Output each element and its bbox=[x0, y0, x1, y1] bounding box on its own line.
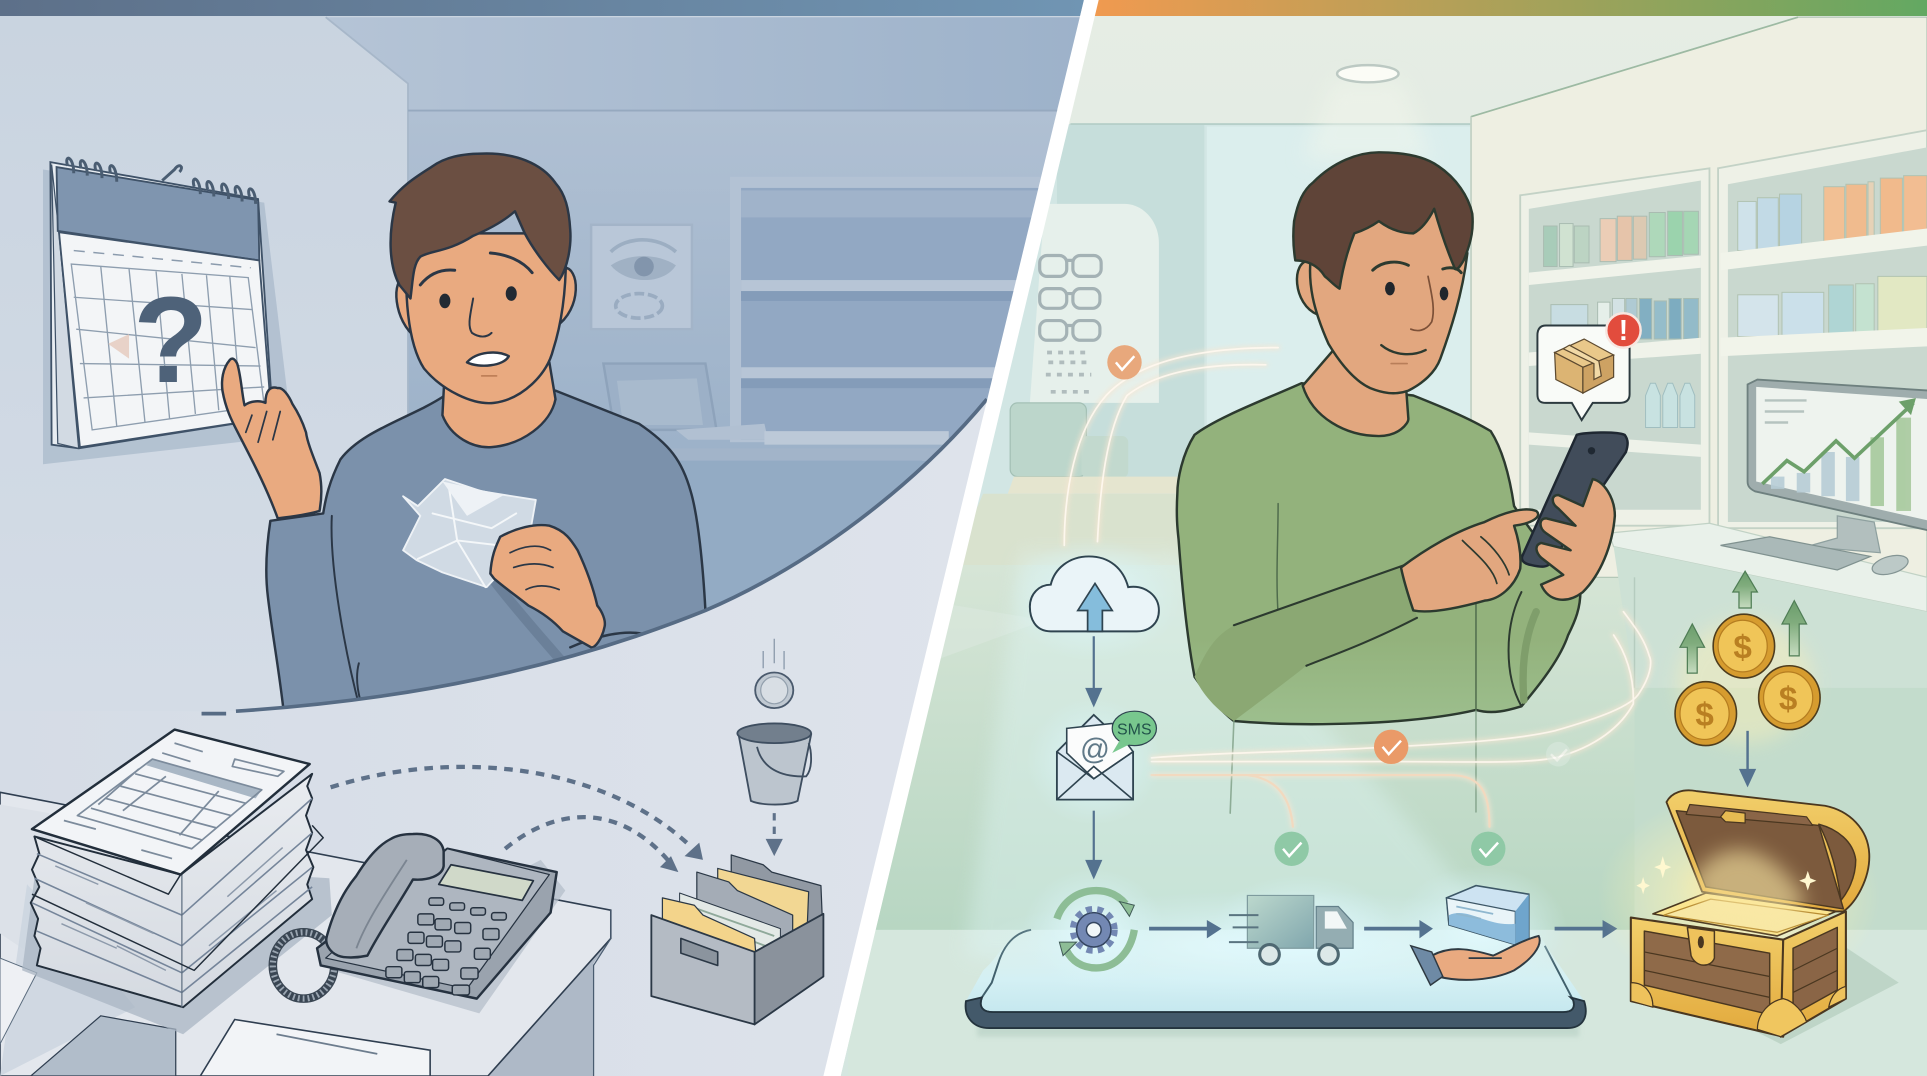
hand holding paper bbox=[490, 525, 605, 647]
badge: green check right bbox=[1471, 832, 1505, 866]
eye poster bbox=[591, 225, 692, 329]
desk bbox=[0, 792, 611, 1076]
neck bbox=[1303, 350, 1408, 436]
corner brackets bbox=[1631, 983, 1653, 1007]
shelving unit right bbox=[1718, 130, 1927, 528]
sleeve folds bbox=[1195, 565, 1417, 721]
bottles lower bbox=[1646, 383, 1695, 427]
medicine boxes top bbox=[1738, 176, 1927, 251]
telephone base bbox=[317, 849, 557, 999]
ear bbox=[1297, 260, 1317, 314]
arrow: dashed from phone to file box bbox=[505, 817, 678, 872]
green sweater bbox=[1177, 383, 1580, 724]
coin left: $ bbox=[1695, 697, 1714, 734]
reception computer and counter bbox=[602, 362, 949, 598]
icon: notification bubble with parcel bbox=[1537, 313, 1641, 420]
coin top bbox=[1713, 614, 1775, 678]
glow: flowing connection lines bbox=[1064, 348, 1651, 827]
phone bbox=[1522, 432, 1628, 567]
icon: file box with folders bbox=[651, 855, 823, 1024]
glow: holographic projection bbox=[965, 553, 1524, 958]
icon: tablet base bbox=[966, 891, 1586, 1037]
coin left bbox=[1675, 682, 1737, 746]
icon: notification bubble with parcel: ! bbox=[1619, 314, 1628, 346]
mouse bbox=[1870, 552, 1910, 578]
coin right bbox=[1759, 666, 1820, 730]
icon: gold coins bbox=[1675, 614, 1820, 746]
panel: after, automated process bbox=[836, 0, 1927, 1076]
question mark: ? bbox=[133, 272, 208, 409]
sparkles bbox=[1636, 856, 1816, 894]
right wall bbox=[1471, 17, 1927, 577]
face bbox=[1310, 197, 1467, 393]
cabinet and counter bbox=[946, 403, 1186, 577]
arrow: cloud to messages bbox=[1085, 636, 1102, 708]
background clinic room bbox=[876, 16, 1927, 930]
medicine boxes upper bbox=[1544, 211, 1698, 267]
top invoice sheet bbox=[32, 730, 310, 875]
icon: cloud upload bbox=[1030, 556, 1159, 631]
person: worried patient bbox=[222, 154, 737, 725]
arrow: customer to treasure chest bbox=[1555, 920, 1617, 938]
raised hand pointing at calendar bbox=[222, 359, 321, 518]
email at sign: @ bbox=[1080, 733, 1110, 766]
alert badge bbox=[1606, 313, 1641, 348]
icon: envelope with SMS bubble: SMS bbox=[1117, 722, 1152, 739]
arrow: delivery to customer bbox=[1364, 920, 1433, 938]
face bbox=[406, 233, 566, 403]
shelving unit left bbox=[1520, 168, 1709, 526]
worried eyes bbox=[439, 294, 450, 308]
smiling face details bbox=[1385, 282, 1395, 295]
arrows: rising green arrows bbox=[1680, 571, 1807, 673]
ceiling light bbox=[1310, 64, 1424, 153]
calendar grid bbox=[71, 264, 264, 430]
background room bbox=[0, 16, 1080, 608]
neck bbox=[442, 362, 555, 447]
icon: open treasure chest bbox=[1598, 790, 1899, 1044]
keypad bbox=[386, 898, 506, 995]
coin right: $ bbox=[1779, 681, 1797, 718]
arrow: dashed from paper stack to file box bbox=[331, 767, 703, 860]
empty shelves bbox=[730, 188, 1038, 442]
icon: crumpled paper bbox=[403, 479, 536, 587]
badge: orange check middle bbox=[1374, 730, 1408, 764]
ears bbox=[395, 283, 410, 334]
desk with monitor bbox=[1609, 380, 1927, 688]
check badges bbox=[1107, 345, 1571, 866]
hair bbox=[1293, 152, 1473, 289]
rising bar chart bbox=[1771, 418, 1911, 511]
arrow: sync to delivery bbox=[1149, 920, 1222, 938]
chest side bbox=[1781, 911, 1846, 1037]
box side and front bbox=[755, 914, 823, 1024]
arrow: messages to sync bbox=[1085, 811, 1102, 879]
divider between panels bbox=[823, 0, 1099, 1076]
handset bbox=[326, 834, 444, 957]
icon: falling coin bbox=[755, 639, 793, 708]
icon: gear with sync arrows bbox=[1057, 891, 1134, 968]
hand holding phone bbox=[1536, 479, 1615, 600]
icon: delivery truck bbox=[1229, 895, 1353, 964]
jagged sheet edges bbox=[31, 774, 313, 1007]
icon: wall calendar with question mark bbox=[43, 158, 292, 464]
hair bbox=[390, 154, 570, 298]
monitor stand bbox=[1807, 516, 1880, 553]
medicine boxes middle bbox=[1738, 276, 1927, 337]
top status bar: after bbox=[1094, 0, 1927, 16]
arrow: dashed from bucket to file box bbox=[766, 813, 783, 856]
icon: stack of paper forms bbox=[22, 730, 332, 1034]
floor bbox=[860, 565, 1635, 934]
person: happy patient with phone bbox=[1177, 152, 1628, 813]
badge: orange check upper bbox=[1107, 345, 1142, 380]
glasses display and eye chart bbox=[1030, 204, 1159, 403]
icon: bucket bbox=[737, 723, 811, 805]
curved room boundary bbox=[236, 399, 987, 711]
top status bar: before bbox=[0, 0, 1084, 16]
icon: desk telephone bbox=[273, 834, 565, 1013]
parcel box bbox=[1555, 339, 1614, 393]
badge: faint check bbox=[1546, 742, 1571, 766]
chest opening bbox=[1653, 893, 1836, 936]
icon: envelope with SMS bubble bbox=[1057, 711, 1156, 800]
chest front bbox=[1631, 918, 1783, 1037]
table surface bbox=[848, 930, 1927, 1076]
icon: hand receiving lens box bbox=[1411, 886, 1540, 985]
lower body fading out bbox=[1230, 710, 1476, 813]
binder rings bbox=[67, 158, 256, 204]
clasp bbox=[1687, 927, 1714, 965]
badge: green check left bbox=[1274, 832, 1309, 866]
lid bbox=[1666, 790, 1869, 911]
coin top: $ bbox=[1733, 629, 1752, 666]
glow: coins halo bbox=[1678, 620, 1813, 743]
panel: before, manual process bbox=[0, 0, 1106, 1076]
pointing hand bbox=[1401, 509, 1538, 611]
coiled cord bbox=[273, 932, 334, 999]
monitor screen bbox=[1748, 380, 1927, 531]
loose papers on desk bbox=[200, 1019, 430, 1076]
keyboard bbox=[1721, 537, 1870, 570]
glow: icon halos bbox=[1008, 538, 1567, 991]
arrow: coins to chest bbox=[1739, 731, 1756, 787]
medicine boxes middle bbox=[1551, 298, 1698, 339]
sweater bbox=[265, 389, 706, 706]
